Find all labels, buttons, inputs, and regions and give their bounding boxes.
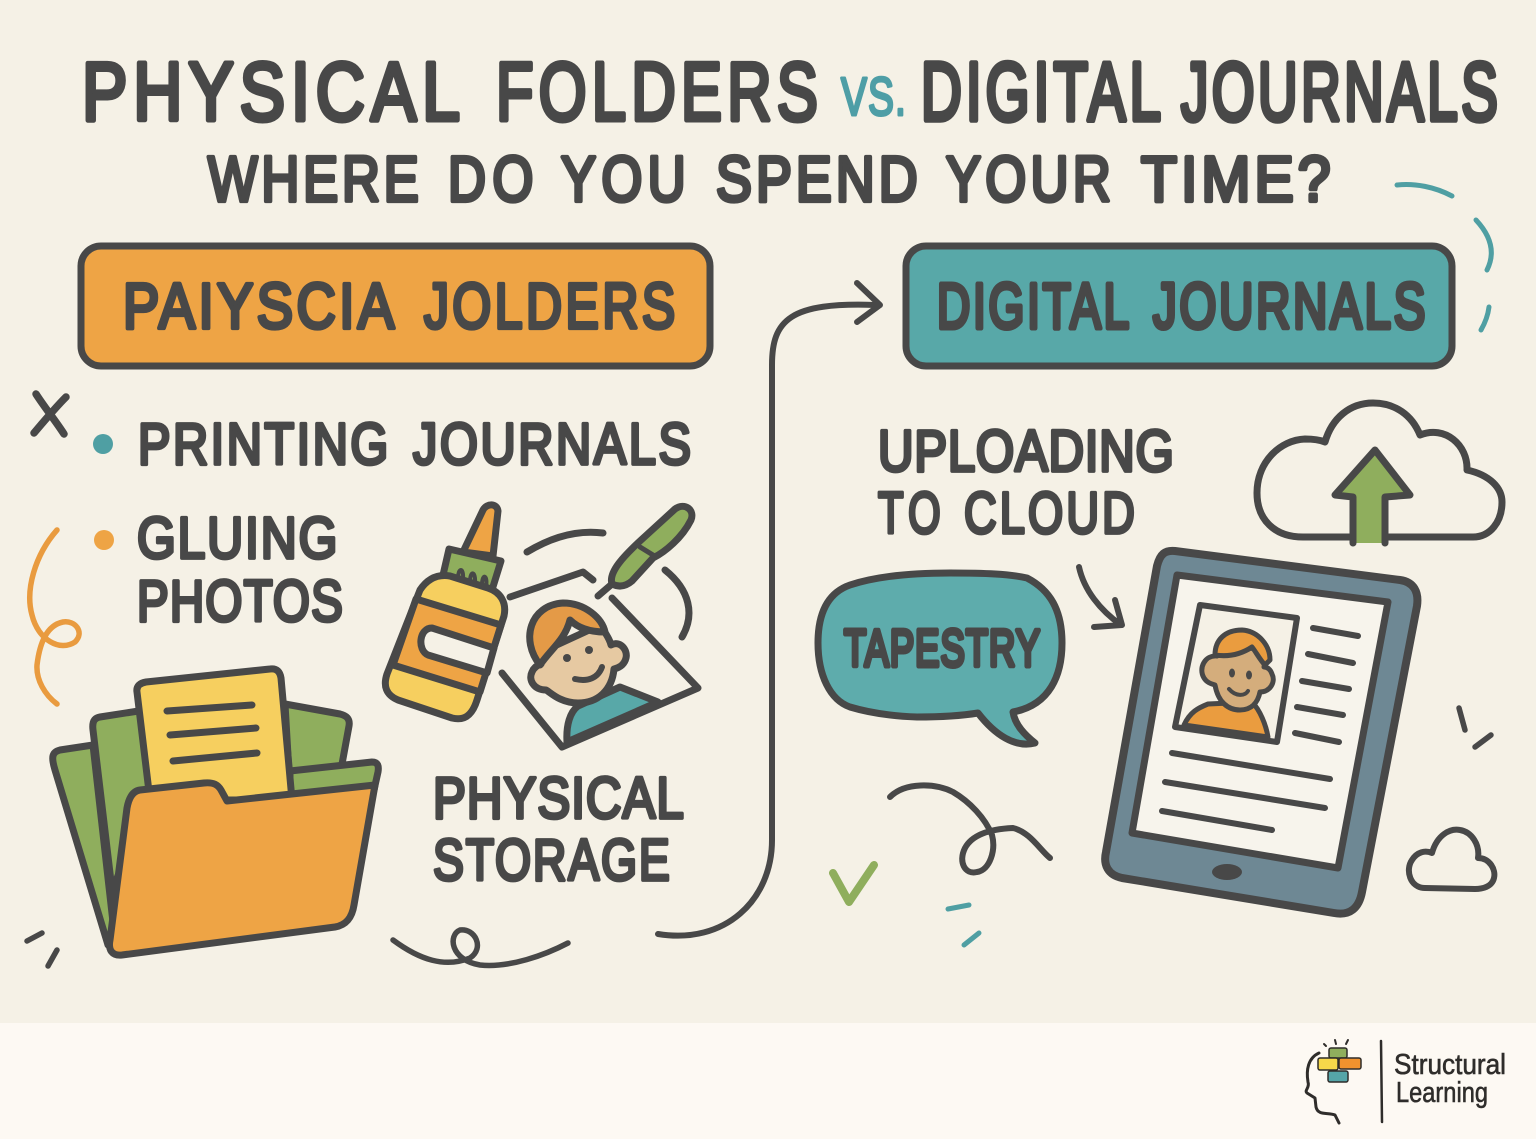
logo: structural learning [1306,1040,1506,1123]
heading: digital journals: DIGITAL [937,271,1129,342]
icon: small cloud [1409,830,1494,889]
logo: structural learning: Learning [1396,1077,1488,1109]
bullet: gluing photos [94,507,343,634]
doodle: loop squiggle [890,785,1050,872]
title: VS. [841,66,906,126]
title [82,44,1498,139]
label: uploading to cloud: TO [878,480,941,546]
bullet: gluing photos: GLUING [137,507,337,571]
icon: pen and photo [502,506,698,747]
subtitle: SPEND [716,143,918,215]
heading: physical folders: JOLDERS [424,271,675,342]
doodle: x mark [34,394,66,434]
subtitle: YOU [561,144,686,215]
icon: child portrait [530,603,658,742]
doodle: orange squiggle [30,530,79,704]
footer band [0,1023,1536,1139]
icon: upload cloud [1257,403,1502,543]
arrow: folders to journals [658,283,880,936]
label: uploading to cloud: UPLOADING [878,419,1174,484]
doodle: bottom squiggle [393,930,568,965]
speech bubble: tapestry [818,573,1062,744]
icon: glue bottle [385,505,505,719]
tablet photo [1175,605,1297,742]
doodle: ticks right [1459,708,1491,747]
bullet: gluing photos: PHOTOS [137,570,343,634]
title: PHYSICAL [82,46,460,139]
logo: structural learning: Structural [1394,1049,1506,1081]
icon: folder [53,669,378,955]
label: physical storage: PHYSICAL [433,766,684,831]
subtitle: TIME? [1141,144,1331,216]
bullet: printing journals: JOURNALS [413,413,691,477]
subtitle: WHERE [208,144,419,215]
subtitle: DO [448,144,533,215]
doodle: teal dashes [948,905,979,945]
bullet: printing journals [93,413,691,477]
subtitle [208,143,1331,216]
title: FOLDERS [496,46,818,138]
bullet: printing journals: PRINTING [138,413,388,477]
icon: pen [598,506,692,596]
label: physical storage: STORAGE [433,828,670,893]
subtitle: YOUR [946,144,1111,215]
heading: physical folders [81,246,710,366]
label: physical storage [433,766,684,893]
doodle: teal arcs [1397,184,1491,330]
title: DIGITAL [921,46,1161,139]
arrow: cloud to tablet [1079,567,1122,627]
title: JOURNALS [1181,44,1498,138]
icon: tablet [1105,551,1417,914]
heading: digital journals [906,246,1452,366]
doodle: green check mark [833,865,874,902]
heading: physical folders: PAIYSCIA [123,270,395,342]
label: uploading to cloud [878,419,1174,546]
heading: digital journals: JOURNALS [1153,270,1425,342]
speech bubble: tapestry: TAPESTRY [844,618,1040,678]
doodle: ticks left [27,933,57,966]
label: uploading to cloud: CLOUD [964,482,1135,546]
